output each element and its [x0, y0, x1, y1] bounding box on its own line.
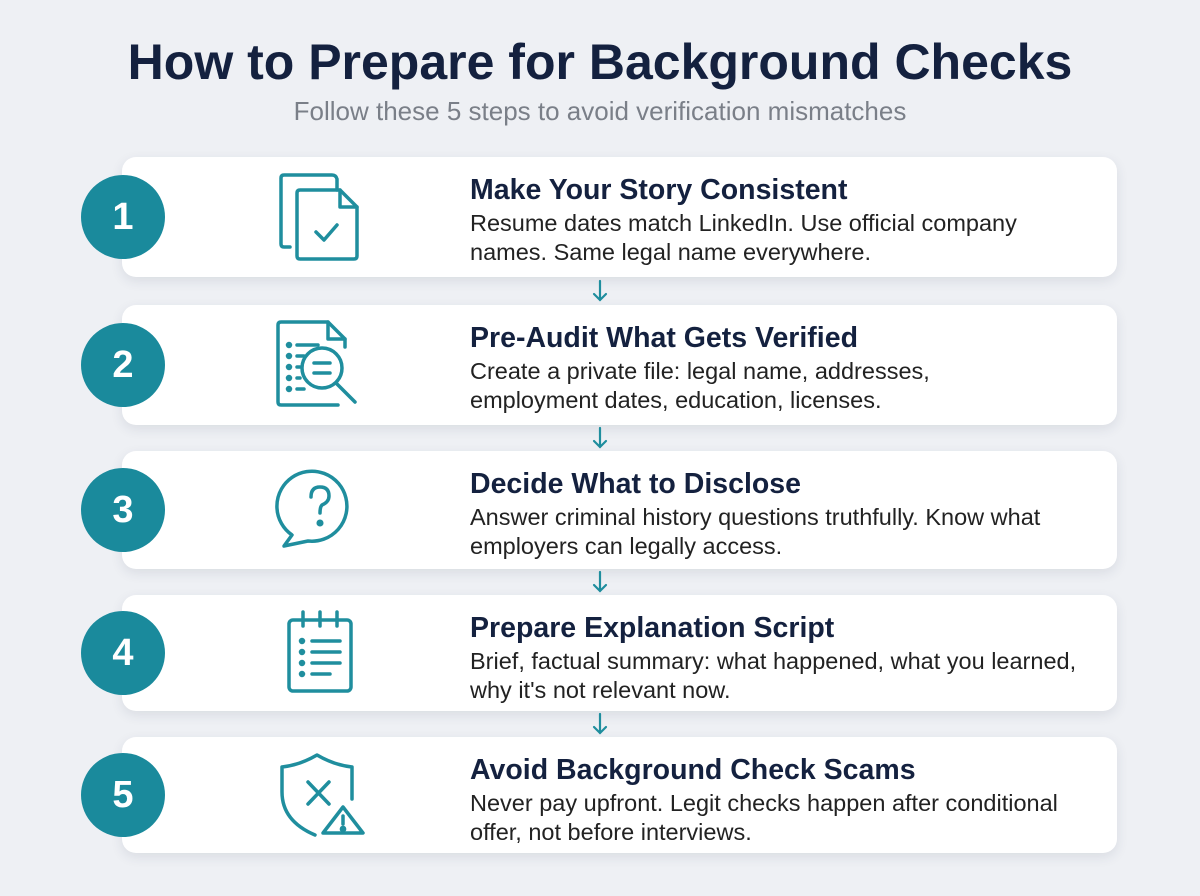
number badge 4: 4 — [112, 632, 134, 674]
icon: documents check — [279, 173, 359, 261]
text: step 2: Pre-Audit What Gets Verified — [470, 322, 858, 354]
number badge 3 — [81, 468, 165, 552]
text: step 2: employment dates, education, licenses. — [470, 387, 881, 413]
text: step 3: Answer criminal history questions truthfully. Know what — [470, 504, 1040, 530]
text: step 3: employers can legally access. — [470, 533, 782, 559]
number badge 2 — [81, 323, 165, 407]
text: step 1 — [470, 174, 1017, 265]
text: step 4: Prepare Explanation Script — [470, 612, 834, 644]
text: step 4: why it's not relevant now. — [470, 677, 731, 703]
text: step 1: Resume dates match LinkedIn. Use official company — [470, 210, 1017, 236]
icon: notepad list — [287, 610, 353, 693]
number badge 1: 1 — [112, 196, 134, 238]
text: step 5 — [470, 754, 1058, 845]
number badge 4 — [81, 611, 165, 695]
text: step 4 — [470, 612, 1076, 703]
subtitle: Follow these 5 steps to avoid verification mismatches — [294, 96, 906, 126]
panel: step 3 — [122, 451, 1117, 569]
arrow 3 — [592, 570, 608, 592]
arrow 1 — [592, 280, 608, 302]
icon: question bubble — [275, 470, 349, 548]
text: step 3 — [470, 468, 1040, 559]
title: How to Prepare for Background Checks — [128, 34, 1072, 90]
number badge 3: 3 — [112, 489, 134, 531]
text: step 4: Brief, factual summary: what happened, what you learned, — [470, 648, 1076, 674]
number badge 1 — [81, 175, 165, 259]
panel: step 4 — [122, 595, 1117, 711]
text: step 1: names. Same legal name everywhere. — [470, 239, 871, 265]
panel: step 5 — [122, 737, 1117, 853]
text: step 5: offer, not before interviews. — [470, 819, 752, 845]
text: step 1: Make Your Story Consistent — [470, 174, 847, 206]
text: step 3: Decide What to Disclose — [470, 468, 801, 500]
panel: step 2 — [122, 305, 1117, 425]
text: step 5: Never pay upfront. Legit checks happen after conditional — [470, 790, 1058, 816]
number badge 5 — [81, 753, 165, 837]
number badge 5: 5 — [112, 774, 134, 816]
text: step 2: Create a private file: legal name, addresses, — [470, 358, 930, 384]
icon: document search — [276, 320, 357, 407]
panel: step 1 — [122, 157, 1117, 277]
arrow 4 — [592, 712, 608, 734]
icon: shield warning — [280, 753, 365, 837]
arrow 2 — [592, 426, 608, 448]
text: step 5: Avoid Background Check Scams — [470, 754, 916, 786]
number badge 2: 2 — [112, 344, 134, 386]
text: step 2 — [470, 322, 930, 413]
